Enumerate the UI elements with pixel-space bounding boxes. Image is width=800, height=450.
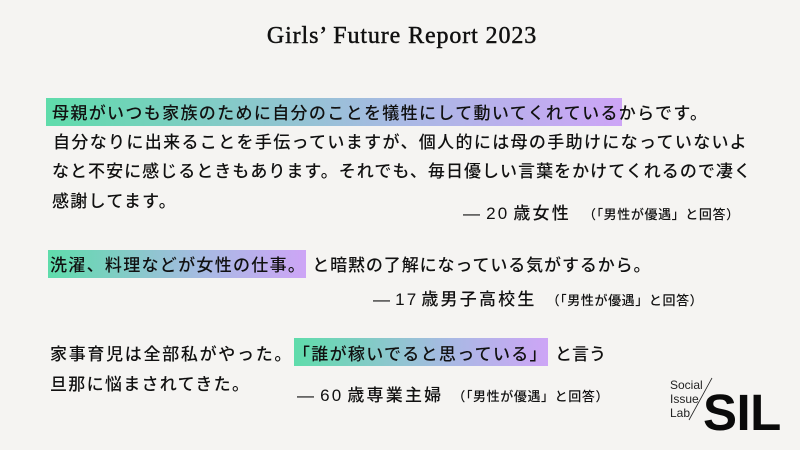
highlight bar 3 bbox=[294, 338, 548, 366]
quote 1 line 4: 感謝してます。 bbox=[52, 192, 177, 211]
highlight bar 2 bbox=[48, 250, 306, 278]
logo small text: Issue bbox=[670, 392, 699, 406]
panel: quote 1 bbox=[46, 98, 752, 223]
quote 2 line: 洗濯、料理などが女性の仕事。 と暗黙の了解になっている気がするから。 bbox=[50, 256, 651, 275]
quote 1 line 3: なと不安に感じるときもあります。それでも、毎日優しい言葉をかけてくれるので凄く bbox=[52, 162, 752, 181]
quote 3 line 1 end: と言う bbox=[555, 345, 606, 364]
logo: Social Issue Lab SIL bbox=[670, 378, 781, 441]
quote 3 line 1 start: 家事育児は全部私がやった。 bbox=[50, 345, 293, 364]
highlight bar 1 bbox=[46, 98, 622, 126]
logo small text: Social bbox=[670, 378, 703, 392]
logo small text bbox=[670, 378, 703, 420]
quote 3 highlighted words: 「誰が稼いでると思っている」 bbox=[293, 345, 548, 364]
logo slash bbox=[688, 378, 712, 420]
panel: quote 3 bbox=[50, 338, 609, 405]
quote 3 line 2: 旦那に悩まされてきた。 bbox=[50, 375, 250, 394]
title: Girls’ Future Report 2023 bbox=[267, 23, 537, 49]
logo small text: Lab bbox=[670, 406, 690, 420]
quote 1 line 1: 母親がいつも家族のために自分のことを犠牲にして動いてくれているからです。 bbox=[52, 104, 708, 123]
attribution 1: — 20 歳女性 （「男性が優遇」と回答） bbox=[463, 204, 740, 223]
attribution 2: — 17 歳男子高校生 （「男性が優遇」と回答） bbox=[373, 290, 703, 309]
panel: quote 2 bbox=[48, 250, 703, 309]
logo SIL: SIL bbox=[703, 384, 781, 441]
quote 1 line 2: 自分なりに出来ることを手伝っていますが、個人的には母の手助けになっていないよ bbox=[53, 133, 748, 152]
attribution 3: — 60 歳専業主婦 （「男性が優遇」と回答） bbox=[297, 386, 609, 405]
